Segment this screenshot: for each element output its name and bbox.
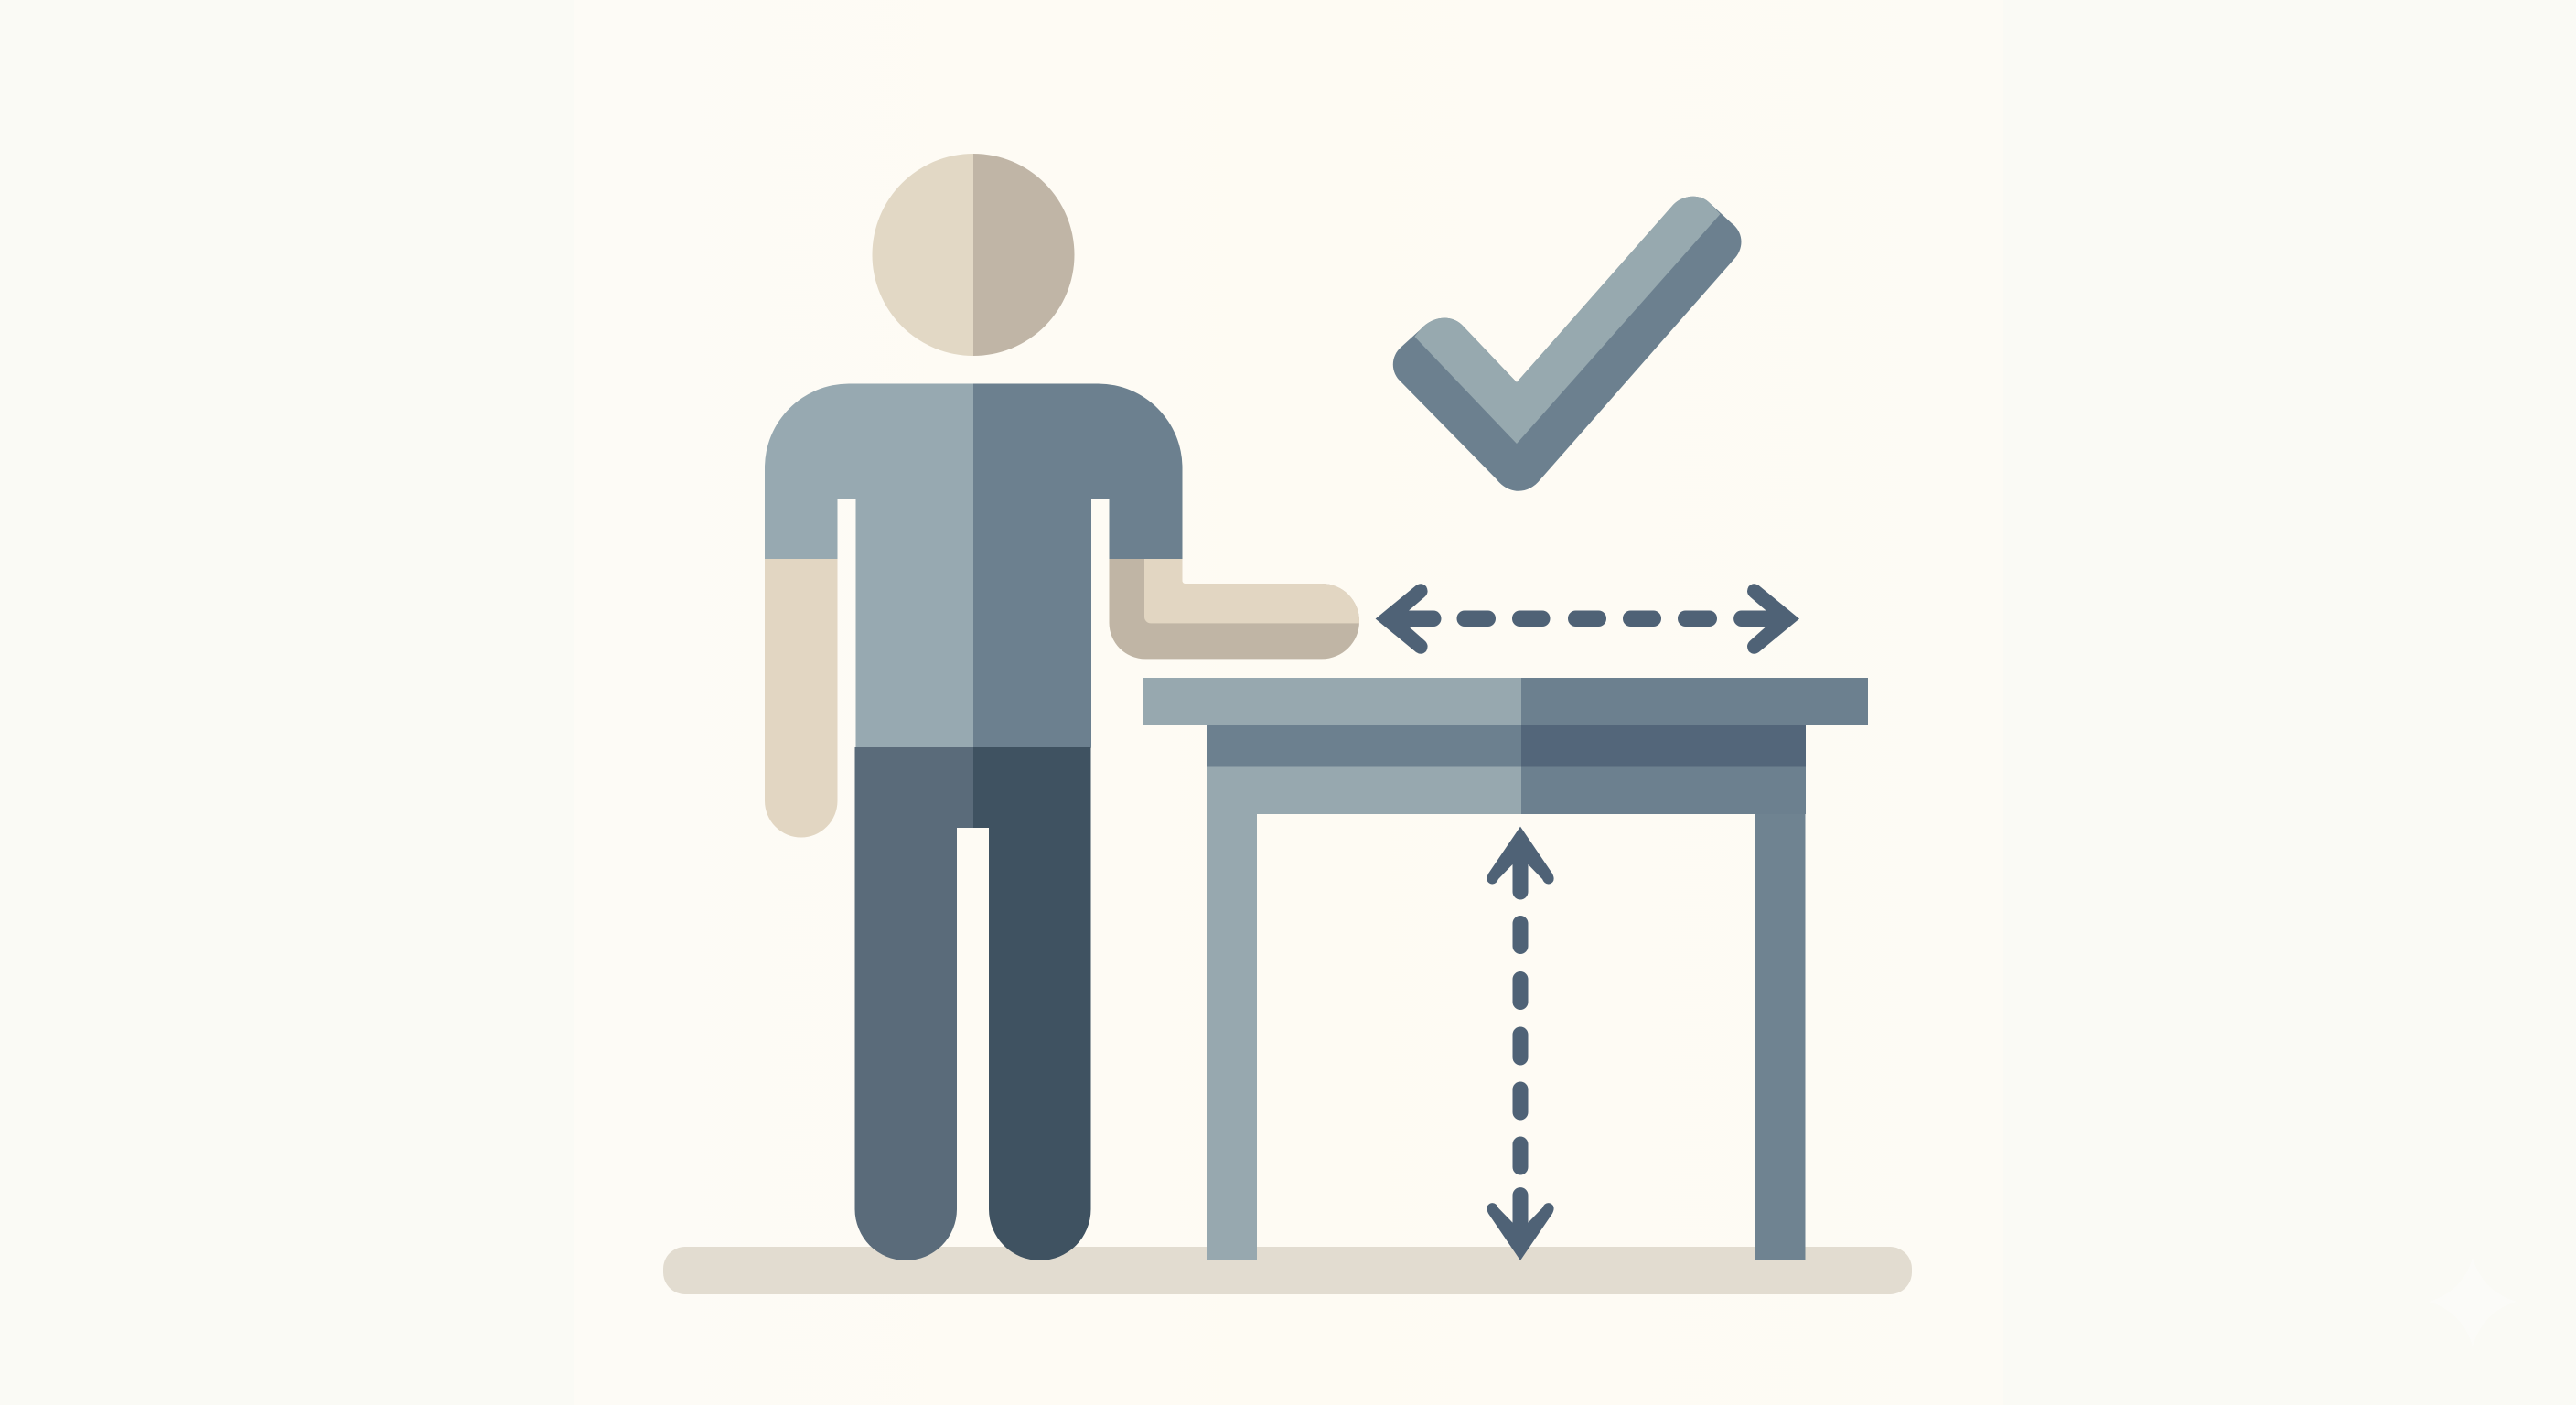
vertical height arrow (dashed, double-headed) bbox=[1487, 827, 1554, 1260]
horizontal depth arrow (dashed, double-headed) bbox=[1376, 584, 1799, 654]
trousers bbox=[854, 747, 1092, 1264]
icon: faint sparkle watermark bbox=[2429, 1258, 2517, 1346]
shirt bbox=[765, 384, 1182, 748]
floor bbox=[663, 1247, 1912, 1294]
icon: check mark bbox=[1393, 197, 1741, 491]
icon: head bbox=[873, 154, 1074, 356]
dashes bbox=[1456, 611, 1717, 627]
table top bbox=[1143, 678, 1868, 725]
left arm bbox=[765, 559, 838, 838]
table right leg bbox=[1755, 814, 1806, 1260]
left arrowhead bbox=[1376, 584, 1442, 654]
right arrowhead bbox=[1733, 584, 1799, 654]
illustration: person standing at correctly sized table bbox=[663, 154, 1912, 1294]
table apron bbox=[1208, 725, 1806, 767]
dashes bbox=[1513, 916, 1528, 1174]
top arrowhead bbox=[1487, 827, 1554, 900]
bent right arm bbox=[1109, 559, 1359, 659]
table left leg bbox=[1208, 814, 1257, 1260]
table bbox=[1143, 678, 1868, 1260]
bottom arrowhead bbox=[1487, 1187, 1554, 1260]
table frame rail bbox=[1208, 767, 1806, 814]
